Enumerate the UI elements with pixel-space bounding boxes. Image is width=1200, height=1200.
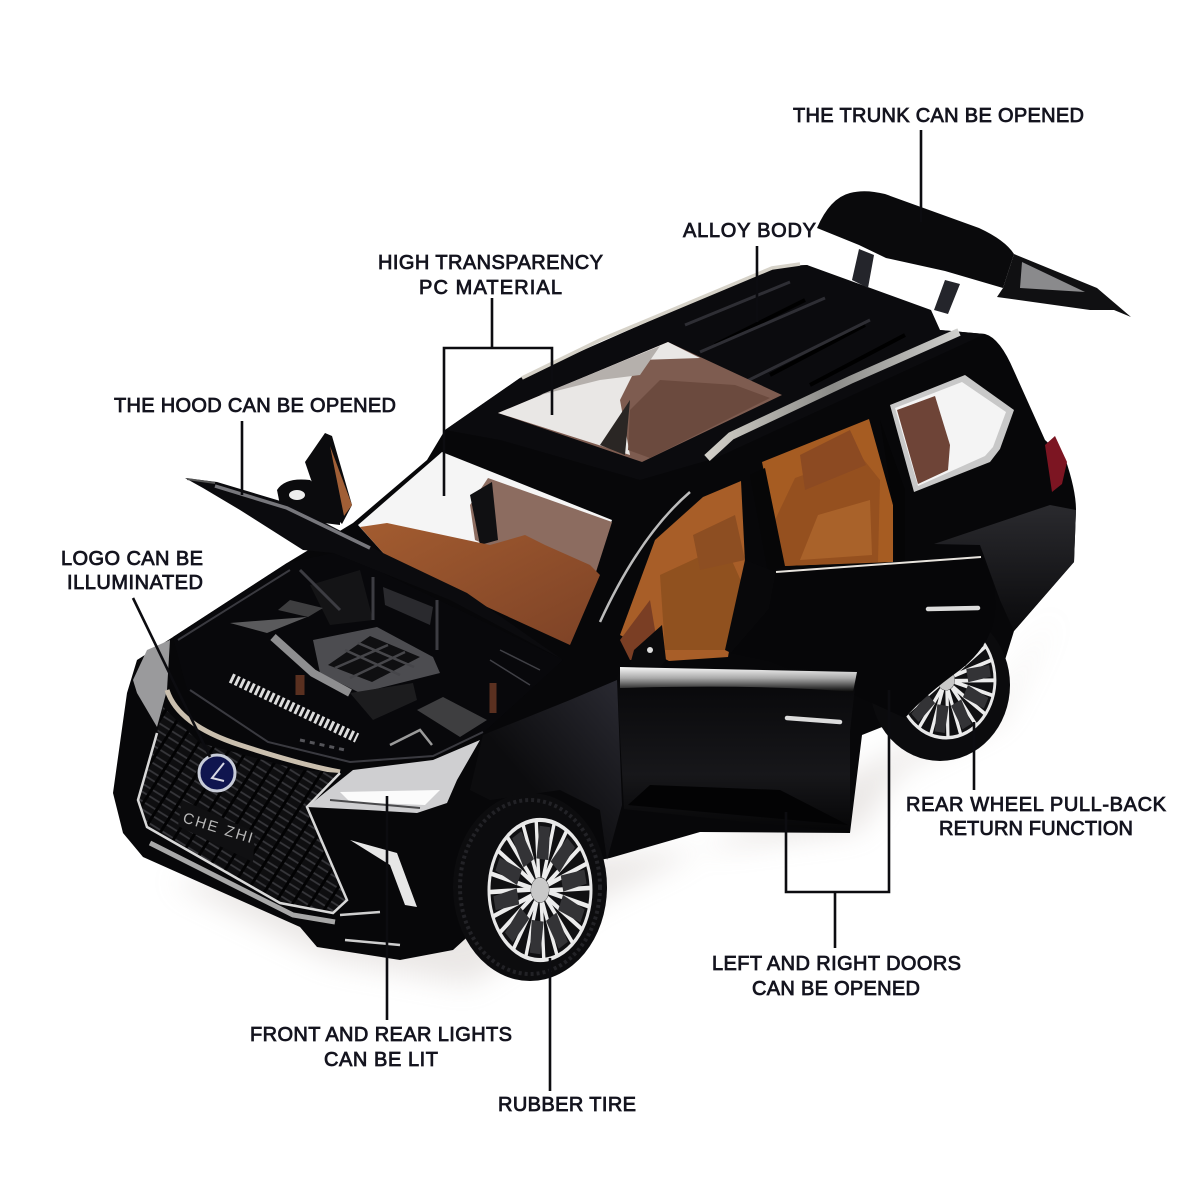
- rear door open: [731, 557, 995, 718]
- label: logo: ILLUMINATED: [67, 572, 203, 594]
- roof panel: [445, 265, 985, 480]
- left roof rail: [522, 264, 800, 378]
- rear quarter window: [890, 375, 1014, 492]
- trunk glass: [997, 254, 1131, 317]
- firewall panels: [383, 587, 433, 625]
- label: trunk: THE TRUNK CAN BE OPENED: [793, 105, 1084, 127]
- engine bay: [173, 553, 563, 763]
- A-pillar highlight: [600, 492, 690, 622]
- logo badge: [199, 755, 235, 791]
- bracket: transparent material: [444, 298, 552, 496]
- label: high transparency: [378, 252, 603, 299]
- label: rear wheel: RETURN FUNCTION: [939, 818, 1133, 840]
- front door open: [617, 666, 857, 833]
- front door handle: [787, 718, 840, 722]
- trunk struts: [852, 249, 960, 314]
- rear wheel: [870, 609, 1010, 761]
- ground shadow: [170, 610, 1060, 985]
- line: hood: [241, 421, 243, 495]
- rear door opening with seats: [750, 419, 905, 572]
- line: trunk: [920, 130, 922, 222]
- spindle grille: [138, 707, 347, 922]
- label: high transparency: HIGH TRANSPARENCY: [378, 252, 603, 274]
- right door mirror: [628, 625, 666, 680]
- label: high transparency: PC MATERIAL: [419, 277, 562, 299]
- car body silhouette: [113, 265, 1076, 960]
- label: logo: [61, 548, 203, 594]
- grille plate with CHE ZHI: [178, 800, 257, 862]
- chrome spring: [231, 678, 357, 738]
- callout lines: [133, 130, 974, 1091]
- rear door handle: [928, 608, 978, 609]
- grille plate with CHE ZHI: CHE ZHI: [181, 810, 257, 847]
- label: rubber tire: RUBBER TIRE: [498, 1094, 636, 1116]
- front fender highlight: [470, 680, 622, 860]
- battery box: [417, 697, 487, 737]
- intake hose: [273, 637, 350, 693]
- label: hood: THE HOOD CAN BE OPENED: [114, 395, 396, 417]
- label: doors: LEFT AND RIGHT DOORS: [712, 953, 961, 975]
- tail light: [1045, 436, 1067, 492]
- label: rear wheel: [906, 794, 1167, 840]
- label: lights: [250, 1024, 512, 1071]
- label: logo: LOGO CAN BE: [61, 548, 203, 570]
- front door opening with seat: [620, 481, 776, 661]
- fog light accent: [350, 840, 417, 907]
- line: rear wheel: [973, 722, 975, 790]
- line: logo: [133, 598, 210, 757]
- line: tire: [549, 958, 551, 1091]
- front wheel: [453, 793, 607, 981]
- car model: [113, 191, 1131, 981]
- left door mirror and open door: [277, 433, 352, 525]
- black intake tube: [350, 683, 417, 720]
- sunroof glass: [498, 342, 782, 462]
- lower chrome strip: [150, 843, 335, 922]
- text labels: [61, 105, 1167, 1116]
- label: lights: FRONT AND REAR LIGHTS: [250, 1024, 512, 1046]
- label: rear wheel: REAR WHEEL PULL-BACK: [906, 794, 1167, 816]
- right roof rail: [707, 332, 959, 458]
- label: doors: [712, 953, 961, 1000]
- door sheen: [620, 667, 857, 692]
- label: lights: CAN BE LIT: [324, 1049, 438, 1071]
- front headlight: [307, 740, 480, 813]
- left headlight: [133, 640, 170, 727]
- line: lights: [386, 796, 388, 1020]
- label: alloy body: ALLOY BODY: [683, 220, 816, 242]
- windshield and front seats: [358, 452, 612, 645]
- rear bumper: [934, 505, 1076, 631]
- bay rim highlight: [178, 570, 483, 762]
- lower bumper trim: [340, 912, 400, 945]
- trunk lid: [817, 191, 1014, 288]
- open hood: [185, 478, 563, 660]
- engine cover: [313, 627, 440, 693]
- label: doors: CAN BE OPENED: [752, 978, 920, 1000]
- chrome hood line: [167, 690, 340, 772]
- line: alloy body: [756, 246, 758, 322]
- intake box: [230, 617, 307, 633]
- bracket: doors: [786, 690, 889, 948]
